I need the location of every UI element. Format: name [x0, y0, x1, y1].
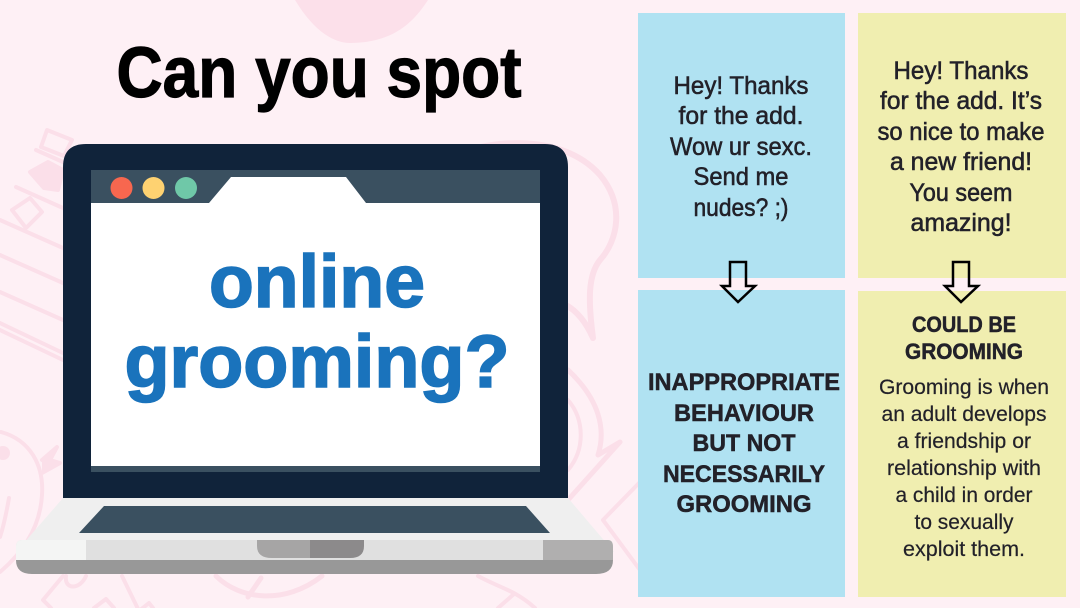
- panel: blue message: Send me: [694, 163, 788, 191]
- panel: yellow message: amazing!: [910, 209, 1012, 237]
- panel: blue message: Wow ur sexc.: [670, 133, 812, 161]
- panel: yellow message: You seem: [910, 179, 1012, 207]
- panel: yellow verdict: relationship with: [887, 456, 1041, 480]
- laptop browser bar: [91, 170, 540, 472]
- panel: yellow verdict: Grooming is when: [879, 375, 1049, 399]
- arrow: right: [945, 262, 978, 302]
- panel: blue message: Hey! Thanks: [674, 72, 808, 100]
- title: Can you spot: [116, 34, 522, 113]
- panel: blue verdict: BEHAVIOUR: [674, 400, 814, 427]
- panel: blue verdict: BUT NOT: [692, 430, 796, 457]
- laptop illustration: [16, 144, 614, 574]
- panel: yellow message: [858, 13, 1066, 278]
- panel: yellow verdict: exploit them.: [903, 537, 1025, 561]
- screen text: online: [209, 240, 425, 323]
- panel: blue verdict: GROOMING: [676, 491, 812, 518]
- browser window: [91, 177, 540, 466]
- laptop screen bezel: [63, 144, 568, 498]
- arrow: left: [722, 262, 755, 302]
- screen text: [124, 240, 510, 403]
- panel: yellow message: a new friend!: [890, 148, 1032, 176]
- panel: yellow message: so nice to make: [878, 118, 1044, 146]
- laptop base: [16, 498, 614, 574]
- panel: blue verdict: [638, 290, 845, 597]
- panel: yellow verdict: GROOMING: [905, 339, 1023, 364]
- panel: blue message: for the add.: [678, 102, 804, 130]
- panel: yellow message: Hey! Thanks: [894, 57, 1028, 85]
- panel: yellow verdict: [858, 291, 1066, 597]
- screen text: grooming?: [124, 320, 510, 403]
- panel: blue message: [638, 13, 845, 278]
- panel: yellow verdict: a child in order: [896, 483, 1032, 507]
- panel: yellow verdict: an adult develops: [882, 402, 1046, 426]
- panel: yellow verdict: COULD BE: [912, 312, 1016, 337]
- browser buttons: [110, 177, 197, 199]
- panel: yellow verdict: a friendship or: [897, 429, 1031, 453]
- panel: blue verdict: NECESSARILY: [663, 461, 825, 488]
- panel: blue verdict: INAPPROPRIATE: [648, 369, 840, 396]
- panel: blue message: nudes? ;): [694, 194, 788, 222]
- panel: yellow verdict: to sexually: [914, 510, 1014, 534]
- panel: yellow message: for the add. It’s: [880, 87, 1042, 115]
